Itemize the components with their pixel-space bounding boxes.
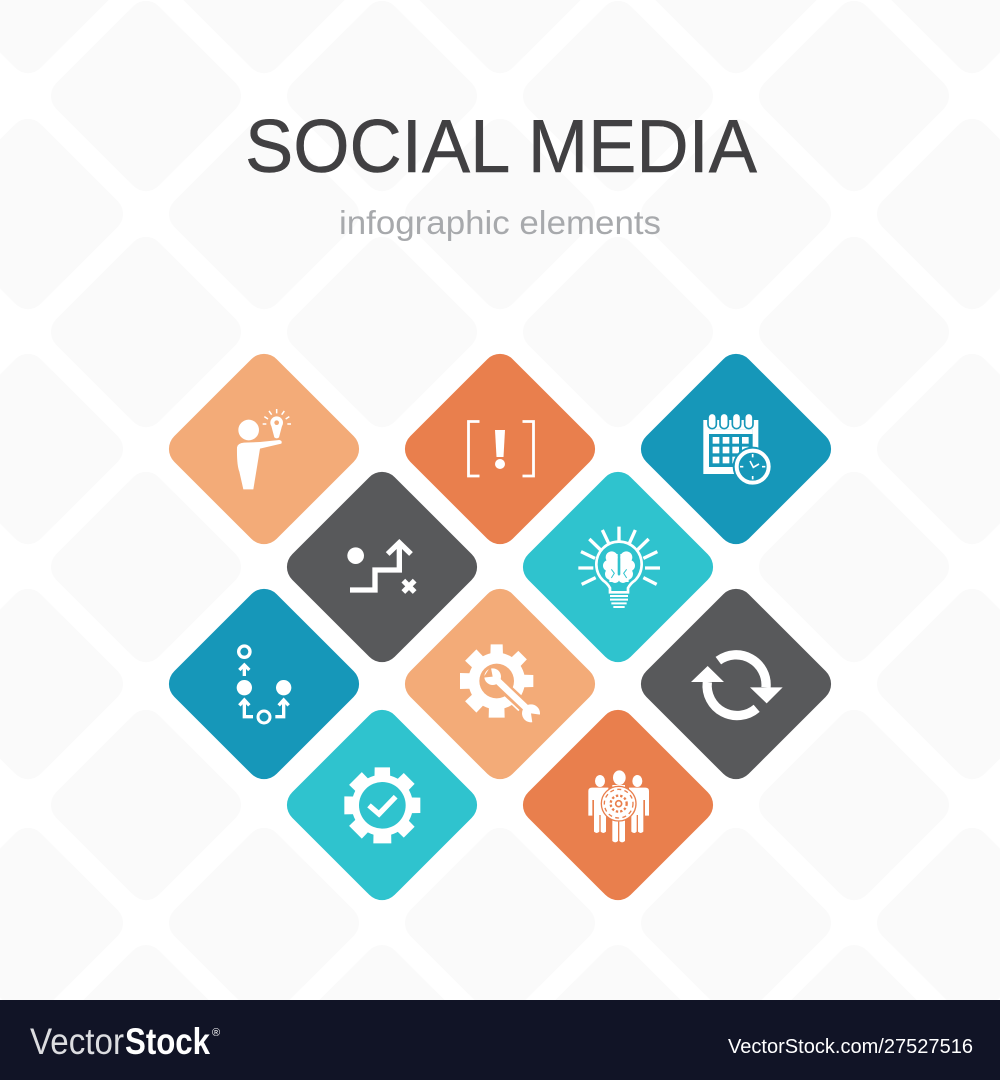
panel: calendar bbox=[633, 346, 839, 552]
panel: team gear bbox=[515, 702, 721, 908]
panel: steps strategy bbox=[279, 464, 485, 670]
panel: person with idea bbox=[161, 346, 367, 552]
footer logo: Vector bbox=[30, 1021, 124, 1062]
panel: brain idea bbox=[515, 464, 721, 670]
panel: verified gear bbox=[279, 702, 485, 908]
panel: attention bbox=[397, 346, 603, 552]
subtitle: infographic elements bbox=[339, 204, 661, 241]
footer bar bbox=[0, 1000, 1000, 1080]
icon: refresh arrows bbox=[691, 655, 783, 716]
footer image id: VectorStock.com/27527516 bbox=[728, 1036, 973, 1058]
icon: calendar with clock bbox=[703, 413, 773, 487]
icon: exclamation in brackets bbox=[468, 422, 534, 476]
footer logo: ® bbox=[212, 1027, 220, 1039]
icon: light bulb with brain bbox=[578, 527, 660, 607]
icon: gear with wrench bbox=[460, 644, 543, 725]
panel: process flow bbox=[161, 581, 367, 787]
footer logo bbox=[30, 1021, 220, 1062]
title: SOCIAL MEDIA bbox=[245, 104, 757, 188]
icon: circular flow arrows bbox=[237, 646, 291, 723]
icon: team with gear bbox=[588, 770, 649, 842]
icon: person holding light bulb bbox=[237, 409, 291, 489]
footer logo: Stock bbox=[125, 1021, 210, 1062]
panel: settings wrench bbox=[397, 581, 603, 787]
icon: gear with check mark bbox=[344, 767, 420, 843]
panel: refresh bbox=[633, 581, 839, 787]
icon: stairs with arrow and cross bbox=[347, 543, 415, 592]
